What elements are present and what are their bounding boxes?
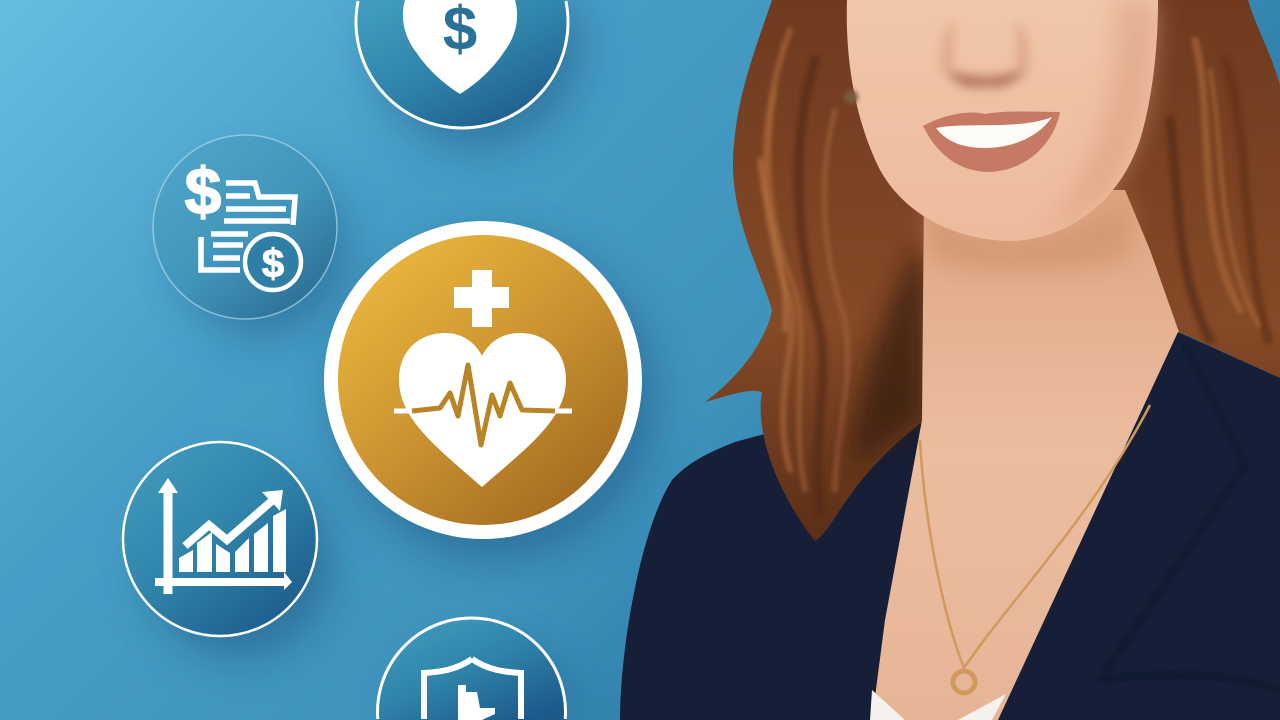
blazer lapel lines xyxy=(1100,345,1278,690)
icon: billing documents badge: $ xyxy=(262,242,284,286)
face xyxy=(847,0,1158,241)
icon: billing documents badge xyxy=(153,135,347,335)
icon: growth chart badge xyxy=(123,442,332,657)
heart xyxy=(399,333,566,487)
lips xyxy=(923,112,1060,172)
hair strands xyxy=(760,30,1268,510)
blazer left xyxy=(620,390,930,720)
plus sign xyxy=(454,270,509,327)
earring xyxy=(844,90,858,104)
hair back xyxy=(705,0,1280,541)
nose xyxy=(940,20,1030,88)
necklace xyxy=(920,405,1150,693)
woman portrait xyxy=(620,0,1280,720)
icon: dollar pin badge xyxy=(356,0,582,149)
white top xyxy=(870,690,1006,720)
dark hair shadow beside neck xyxy=(850,240,925,470)
teeth xyxy=(936,117,1052,148)
icon: central gold heart badge xyxy=(324,221,655,560)
pulse line ends xyxy=(394,408,572,414)
neck shadow xyxy=(925,195,1130,271)
face shading xyxy=(1040,0,1158,235)
icon: billing documents badge: $ xyxy=(185,154,221,228)
blazer right xyxy=(998,332,1280,720)
neck and chest xyxy=(872,190,1180,720)
icon: shield badge xyxy=(377,618,574,720)
pulse line xyxy=(412,365,555,445)
